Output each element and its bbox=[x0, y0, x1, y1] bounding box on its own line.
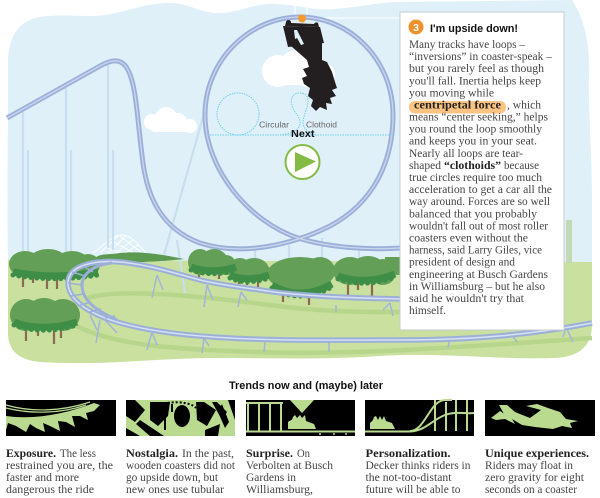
car body bbox=[283, 26, 324, 47]
scene: coaster landscape bbox=[7, 0, 592, 363]
trend: exposure bbox=[6, 400, 116, 496]
panel body text: because bbox=[504, 158, 539, 172]
surprise text bbox=[246, 446, 333, 496]
exposure text: The less bbox=[60, 446, 96, 460]
hedge bbox=[95, 252, 184, 263]
label: circular: Circular bbox=[259, 120, 289, 130]
distant tower bbox=[566, 220, 572, 263]
label: clothoid: Clothoid bbox=[306, 120, 337, 130]
exposure text: Exposure. bbox=[6, 446, 56, 460]
diagram baseline bbox=[210, 134, 392, 136]
white guide lines bbox=[295, 0, 400, 18]
trends heading: Trends now and (maybe) later bbox=[229, 380, 384, 392]
trend: personalization bbox=[365, 400, 474, 496]
panel body text: means “center seeking,” helps bbox=[409, 110, 548, 124]
panel body text: “inversions” in coaster-speak – bbox=[409, 49, 553, 63]
panel body text: Nearly all loops are tear- bbox=[409, 146, 523, 160]
cloud left bbox=[144, 107, 197, 133]
panel body text: in Williamsburg – but he also bbox=[409, 279, 545, 293]
icon: dropping car bbox=[246, 400, 355, 436]
exposure text: restrained you are, the bbox=[6, 458, 113, 472]
loop shape diagrams bbox=[210, 93, 392, 135]
surprise text: Gardens in bbox=[246, 470, 296, 484]
clothoid loop diagram bbox=[280, 93, 316, 135]
circular loop diagram bbox=[217, 93, 259, 135]
unique experiences text: seconds on a coaster bbox=[485, 482, 577, 496]
panel body text: balanced that you probably bbox=[409, 206, 537, 220]
icon: wooden coaster lattice bbox=[126, 400, 235, 436]
trend: nostalgia bbox=[126, 400, 236, 496]
unique experiences text: zero gravity for eight bbox=[485, 470, 585, 484]
trend: surprise bbox=[246, 400, 355, 496]
panel box bbox=[400, 12, 564, 330]
panel body text: true circles require too much bbox=[409, 170, 542, 184]
personalization text: future will be able to bbox=[366, 482, 460, 496]
unique experiences text: Unique experiences. bbox=[485, 446, 589, 460]
loop and hill track bbox=[7, 17, 400, 249]
ground bbox=[8, 260, 592, 363]
panel body text: coasters even without the bbox=[409, 230, 528, 244]
coaster supports bbox=[23, 65, 359, 293]
nostalgia text: Nostalgia. bbox=[126, 446, 178, 460]
panel body text: you round the loop smoothly bbox=[409, 122, 542, 136]
nostalgia text: In the past, bbox=[182, 446, 234, 460]
step number badge bbox=[408, 20, 424, 34]
exposure text: dangerous the ride bbox=[6, 482, 94, 496]
personalization text: Decker thinks riders in bbox=[366, 458, 470, 472]
panel body text: said he wouldn't try that bbox=[409, 291, 525, 305]
icon: floating rider bbox=[485, 400, 595, 436]
unique experiences text: Riders may float in bbox=[485, 458, 573, 472]
highlight pill bbox=[409, 101, 506, 114]
panel body text: “clothoids” bbox=[444, 158, 501, 172]
panel body text: acceleration to get a car all the bbox=[409, 182, 552, 196]
next play button bbox=[286, 145, 320, 179]
panel body text: wouldn't fall out of most roller bbox=[409, 218, 548, 232]
surprise text: Williamsburg, bbox=[246, 482, 313, 496]
nostalgia text: new ones use tubular bbox=[126, 482, 224, 496]
nostalgia text bbox=[126, 446, 236, 496]
panel body text: you moving while bbox=[409, 85, 494, 99]
panel body text: but you rarely feel as though bbox=[409, 61, 544, 75]
surprise text: Verbolten at Busch bbox=[246, 458, 333, 472]
next label: Next bbox=[291, 129, 315, 140]
nostalgia text: go upside down, but bbox=[126, 470, 219, 484]
lower track supports bbox=[90, 275, 573, 353]
personalization text bbox=[366, 446, 470, 496]
panel body text: himself. bbox=[409, 303, 446, 317]
lower tracks bbox=[68, 262, 592, 340]
personalization text: Personalization. bbox=[366, 446, 450, 460]
step number badge: 3 bbox=[413, 22, 419, 34]
tree canopies light bbox=[9, 249, 400, 331]
panel body text: engineering at Busch Gardens bbox=[409, 267, 548, 281]
panel body text: shaped bbox=[409, 158, 441, 172]
sky background bbox=[8, 0, 592, 270]
trend: unique experiences bbox=[485, 400, 595, 496]
panel: I'm upside down bbox=[400, 12, 564, 330]
orange position marker bbox=[298, 14, 306, 22]
rider body and hair bbox=[291, 43, 337, 111]
distant wooden coaster bbox=[93, 235, 146, 253]
panel body text: you'll fall. Inertia helps keep bbox=[409, 73, 541, 87]
cloud behind rider bbox=[262, 50, 335, 87]
panel body text: Many tracks have loops – bbox=[409, 37, 526, 51]
panel body text: and keeps you in your seat. bbox=[409, 134, 537, 148]
clouds bbox=[144, 50, 335, 133]
surprise text: On bbox=[297, 446, 310, 460]
exposure text bbox=[6, 446, 113, 496]
car rails bbox=[285, 20, 319, 27]
icon: dangling feet bbox=[6, 400, 116, 436]
panel body text: , which bbox=[507, 98, 541, 112]
trees bbox=[9, 249, 400, 344]
personalization text: the not-too-distant bbox=[366, 470, 452, 484]
icon: upside-down rider bbox=[283, 20, 337, 111]
exposure text: faster and more bbox=[6, 470, 79, 484]
unique experiences text bbox=[485, 446, 589, 496]
tree canopy scalloped edge bbox=[13, 270, 395, 330]
ground track shadows bbox=[75, 293, 592, 353]
panel body text: harness, said Larry Giles, vice bbox=[409, 243, 542, 257]
panel heading: I'm upside down! bbox=[430, 23, 518, 35]
panel body text: centripetal force bbox=[414, 98, 502, 112]
nostalgia text: wooden coasters did not bbox=[126, 458, 236, 472]
panel body text: president of design and bbox=[409, 255, 515, 269]
panel body text bbox=[409, 37, 553, 317]
surprise text: Surprise. bbox=[246, 446, 293, 460]
rider arm highlight bbox=[294, 30, 304, 45]
icon: car and custom track bbox=[365, 400, 474, 436]
tree trunks bbox=[23, 270, 372, 344]
panel body text: way around. Forces are so well bbox=[409, 194, 551, 208]
tree canopies dark bbox=[13, 267, 395, 327]
